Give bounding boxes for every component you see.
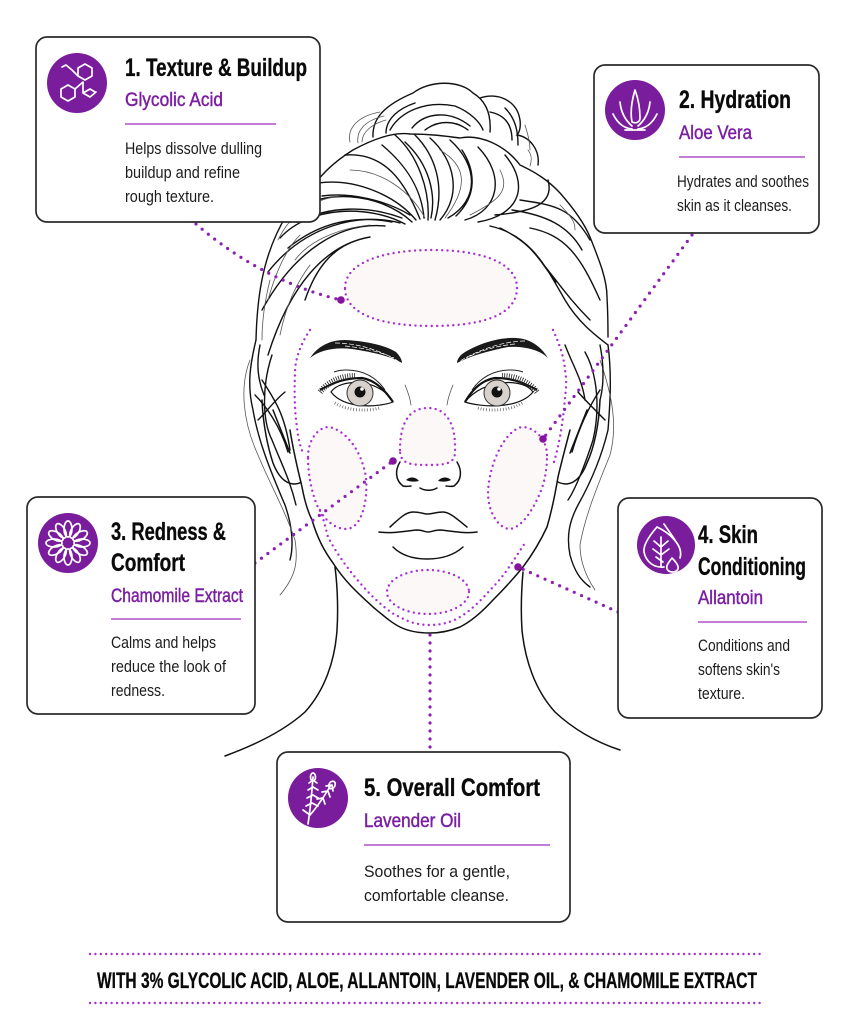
description: rough texture. — [125, 188, 214, 206]
description — [111, 634, 226, 700]
connector 3 — [255, 457, 397, 563]
ears — [262, 400, 600, 484]
panel: redness and comfort — [27, 497, 255, 714]
jawline dotted outline — [295, 330, 566, 625]
ingredient: Lavender Oil — [364, 811, 461, 832]
hair strands — [262, 135, 608, 355]
description: skin as it cleanses. — [677, 197, 792, 215]
description — [364, 863, 510, 905]
icon: leaf drop — [637, 516, 695, 574]
lips — [379, 512, 477, 559]
ingredient: Chamomile Extract — [111, 586, 244, 607]
icon: chamomile flower — [38, 513, 98, 573]
hair outer contour — [256, 134, 608, 340]
connector 4 — [514, 563, 618, 612]
description: texture. — [698, 685, 745, 703]
description: Hydrates and soothes — [677, 173, 809, 191]
connectors — [196, 224, 692, 750]
left side hair — [244, 340, 296, 595]
connector 5 — [428, 635, 432, 750]
description: Conditions and — [698, 637, 790, 655]
heading — [698, 521, 806, 581]
description: redness. — [111, 682, 165, 700]
hair bun — [350, 83, 538, 166]
icon: aloe — [605, 80, 665, 140]
heading — [111, 518, 226, 577]
left eyebrow — [310, 340, 402, 363]
icon: molecule — [47, 53, 107, 113]
face contour — [290, 430, 570, 633]
description — [677, 173, 809, 215]
heading: 4. Skin — [698, 521, 758, 549]
connector 1 — [196, 224, 345, 304]
zone: forehead — [345, 250, 517, 326]
panel: overall comfort — [277, 752, 570, 922]
heading: 5. Overall Comfort — [364, 774, 541, 802]
neck and shoulders — [225, 567, 620, 756]
heading: Comfort — [111, 549, 186, 577]
zone: nose — [400, 408, 455, 465]
connector 2 — [539, 235, 692, 443]
icon: lavender — [288, 768, 348, 828]
left eye — [320, 370, 393, 410]
treatment zones — [295, 250, 566, 625]
ingredient: Aloe Vera — [679, 123, 752, 144]
footer banner — [90, 954, 762, 1003]
heading: Conditioning — [698, 553, 806, 581]
ingredient: Allantoin — [698, 588, 763, 609]
panel: texture and buildup — [36, 37, 320, 222]
face illustration — [225, 83, 620, 756]
heading: 3. Redness & — [111, 518, 226, 546]
description: Soothes for a gentle, — [364, 863, 510, 881]
ingredient: Glycolic Acid — [125, 90, 223, 111]
description: comfortable cleanse. — [364, 887, 509, 905]
heading: 1. Texture & Buildup — [125, 54, 307, 82]
right eye — [465, 370, 537, 410]
panel: skin conditioning — [618, 498, 822, 718]
description — [698, 637, 790, 703]
description: buildup and refine — [125, 164, 240, 182]
zone: right cheek — [488, 427, 547, 529]
description: softens skin's — [698, 661, 780, 679]
description: Helps dissolve dulling — [125, 140, 262, 158]
nose — [397, 385, 460, 490]
description: Calms and helps — [111, 634, 216, 652]
zone: chin — [387, 570, 469, 614]
right side hair — [565, 345, 614, 590]
description — [125, 140, 262, 206]
zone: left cheek — [308, 427, 366, 529]
description: reduce the look of — [111, 658, 226, 676]
panel: hydration — [594, 65, 819, 233]
heading: 2. Hydration — [679, 86, 791, 114]
right eyebrow — [457, 338, 548, 363]
